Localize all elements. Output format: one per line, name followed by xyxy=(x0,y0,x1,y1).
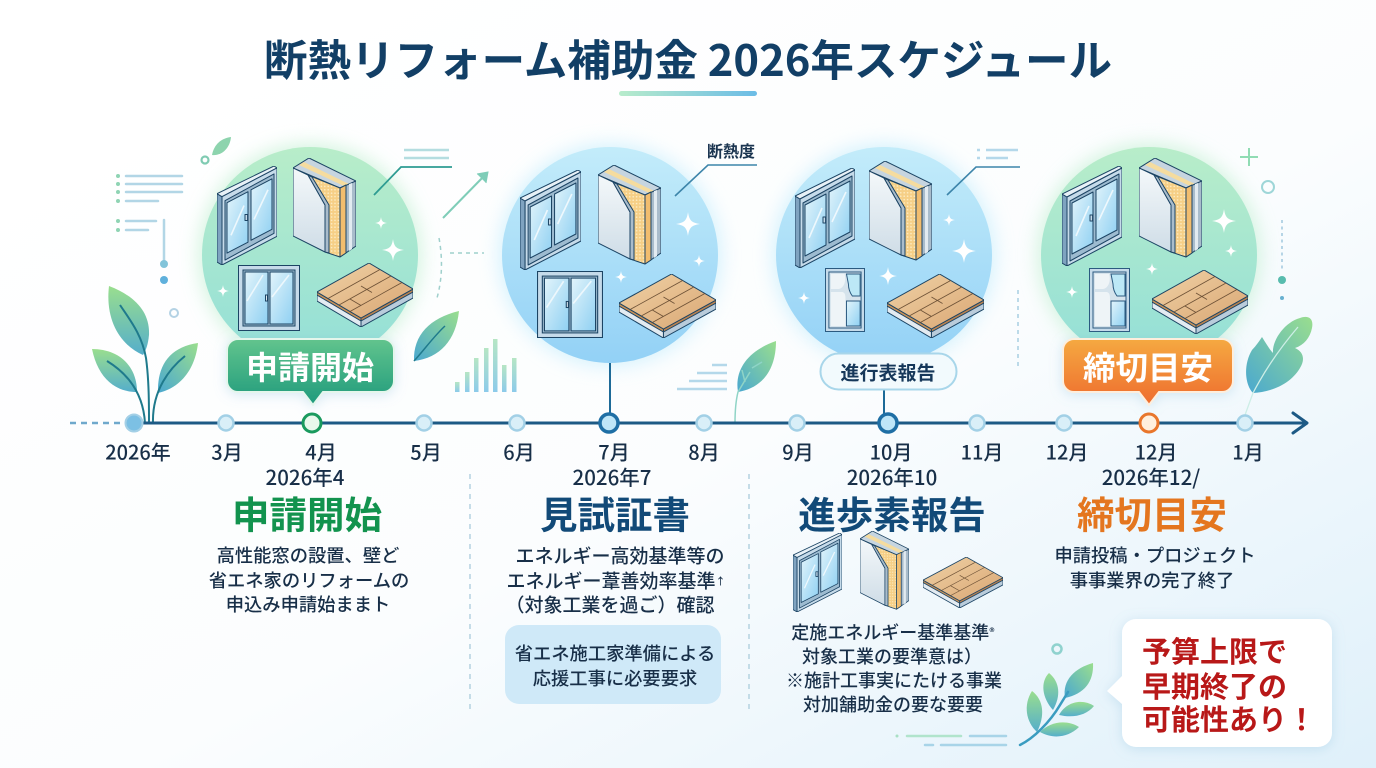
callout leader 1 xyxy=(374,150,452,195)
column: 締切目安: 2026年12/ xyxy=(1102,461,1200,491)
month labels: 11月 xyxy=(961,436,1003,466)
note box: 省エネ施工家準備による xyxy=(515,640,715,666)
arrow up decoration xyxy=(443,172,488,218)
column: 見試証書: 見試証書 xyxy=(540,484,690,540)
dashed decoration xyxy=(437,238,484,298)
column: 進歩素報告: ※施計工事実にたける事業 xyxy=(786,667,1002,693)
month labels: 7月 xyxy=(598,436,630,466)
panel: circle 4 illustration xyxy=(1037,143,1261,367)
column dividers xyxy=(470,474,749,712)
callout: 予算上限 xyxy=(1107,619,1332,747)
right leaf xyxy=(1245,317,1312,415)
badge: 締切目安 xyxy=(1063,339,1233,405)
column: 見試証書 xyxy=(505,461,726,704)
title: 断熱リフォーム補助金 2026年スケジュール xyxy=(264,27,1112,89)
column: 申請開始: 省エネ家のリフォームの xyxy=(209,567,409,593)
leaf decoration xyxy=(414,311,459,361)
dashed decoration right xyxy=(1017,290,1019,370)
column: 見試証書: （対象工業を過ご）確認 xyxy=(505,590,715,618)
column: 見試証書: 2026年7 xyxy=(573,461,651,491)
note box: 応援工事に必要要求 xyxy=(533,665,697,691)
column: 締切目安: 申請投稿・プロジェクト xyxy=(1054,542,1256,568)
title underline xyxy=(619,91,757,96)
right decoration xyxy=(1240,148,1286,300)
month labels: 4月 xyxy=(305,436,337,466)
badge: 申請開始: 申請開始 xyxy=(246,343,374,389)
column: 申請開始 xyxy=(209,461,409,617)
badge: 進行表報告: 進行表報告 xyxy=(840,358,936,386)
column: 締切目安 xyxy=(1054,461,1256,593)
column: 申請開始: 高性能窓の設置、壁ど xyxy=(217,542,399,568)
callout: 予算上限: 早期終了の xyxy=(1142,664,1287,706)
month labels: 5月 xyxy=(410,436,442,466)
month labels: 6月 xyxy=(503,436,535,466)
note box xyxy=(505,625,721,704)
badge: 進行表報告 xyxy=(820,354,956,414)
column: 申請開始: 申込み申請始ままト xyxy=(226,591,390,617)
column: 進歩素報告 xyxy=(786,461,1003,717)
callout: 断熱度 xyxy=(675,138,757,196)
month labels: 1月 xyxy=(1232,436,1264,466)
column: 見試証書: エネルギー葦善効率基準↑ xyxy=(506,566,726,594)
column: 見試証書: エネルギー高効基準等の xyxy=(515,542,725,568)
bottom lines decoration xyxy=(896,734,1006,745)
month labels: 8月 xyxy=(688,436,720,466)
month labels: 12月 xyxy=(1046,436,1088,466)
badge: 申請開始 xyxy=(227,339,394,405)
month labels: 9月 xyxy=(782,436,814,466)
bar chart decoration xyxy=(455,339,516,392)
callout: 予算上限: 予算上限で xyxy=(1142,629,1287,671)
icons small xyxy=(793,531,1003,612)
timeline xyxy=(70,413,1307,433)
column: 進歩素報告: 対加舗助金の要な要要 xyxy=(803,691,983,717)
column: 進歩素報告: 2026年10 xyxy=(847,461,937,491)
speed lines and leaf 8月 xyxy=(677,341,776,423)
month labels: 2026年 xyxy=(105,436,171,466)
column: 進歩素報告: 定施エネルギー基準基準® xyxy=(791,619,995,645)
panel: circle 2 illustration xyxy=(498,143,722,367)
month labels: 3月 xyxy=(211,436,243,466)
column: 進歩素報告: 対象工業の要準意は） xyxy=(802,643,982,669)
sprig decoration xyxy=(1020,644,1094,745)
left small leaf and ring xyxy=(202,137,231,164)
badge: 締切目安: 締切目安 xyxy=(1083,342,1213,390)
month labels: 10月 xyxy=(870,436,912,466)
callout: 断熱度: 断熱度 xyxy=(707,138,755,162)
left decoration: data lines xyxy=(116,174,182,317)
callout leader 3 xyxy=(947,150,1020,195)
column: 申請開始: 申請開始 xyxy=(232,484,382,540)
column: 締切目安: 事事業界の完了終了 xyxy=(1070,567,1234,593)
plant left xyxy=(92,286,198,423)
column: 締切目安: 締切目安 xyxy=(1077,484,1227,540)
column: 進歩素報告: 進歩素報告 xyxy=(798,484,986,540)
column: 申請開始: 2026年4 xyxy=(266,461,345,491)
callout: 予算上限: 可能性あり！ xyxy=(1142,697,1316,739)
month labels: 12月 xyxy=(1135,436,1177,466)
month labels xyxy=(105,436,1264,466)
panel: circle 1 illustration xyxy=(198,143,422,367)
panel: circle 3 illustration xyxy=(772,143,996,367)
connector 7月 xyxy=(609,363,611,414)
